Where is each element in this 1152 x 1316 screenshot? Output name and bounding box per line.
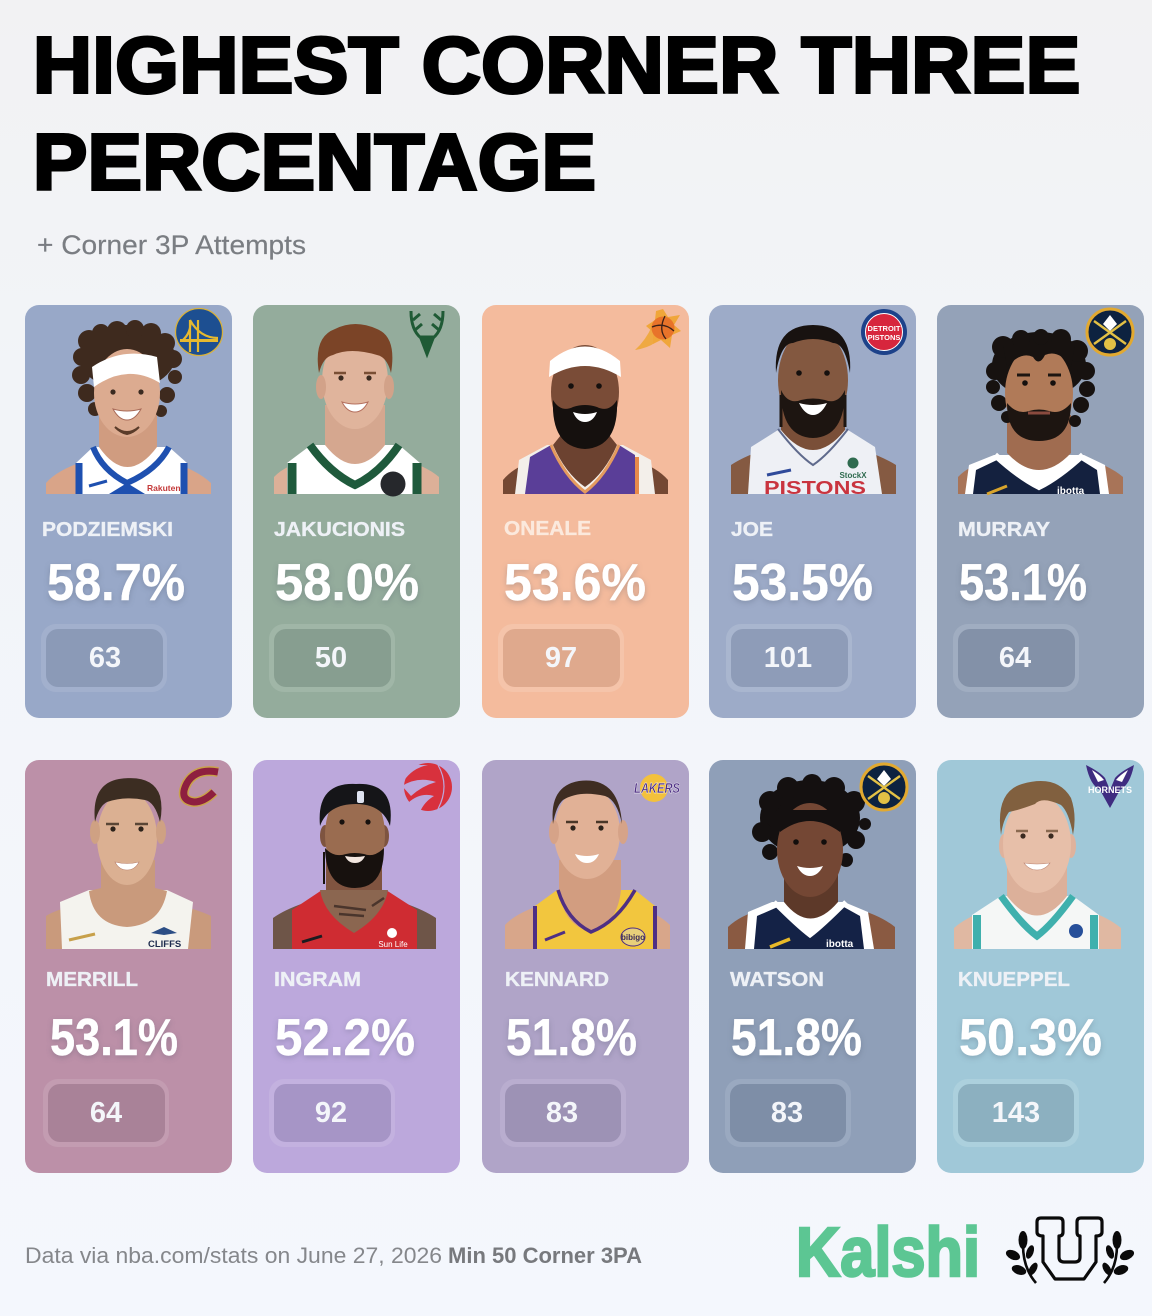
percentage: 51.8% xyxy=(506,1009,637,1067)
card: Podziemski xyxy=(25,305,232,718)
attempts pill: 101 xyxy=(764,642,812,674)
card: Watson xyxy=(709,760,916,1173)
attempts pill: 64 xyxy=(90,1097,122,1129)
portrait: Merrill xyxy=(46,778,211,950)
name: KNUEPPEL xyxy=(958,969,1070,991)
percentage: 50.3% xyxy=(959,1009,1102,1067)
percentage: 53.6% xyxy=(504,554,646,612)
percentage: 53.5% xyxy=(732,554,873,612)
percentage: 58.0% xyxy=(275,554,419,612)
portrait: Watson xyxy=(728,774,895,950)
attempts pill xyxy=(43,1079,169,1147)
team logo: Bucks xyxy=(411,311,443,357)
team logo: Lakers xyxy=(634,774,680,802)
title: PERCENTAGE xyxy=(33,118,596,207)
team logo: Warriors xyxy=(176,308,222,356)
team logo: Nuggets xyxy=(861,764,907,810)
portrait: Joe xyxy=(731,325,896,498)
name: PODZIEMSKI xyxy=(42,519,173,541)
percentage: 52.2% xyxy=(275,1009,415,1067)
card: Jakucionis xyxy=(253,305,460,718)
name: KENNARD xyxy=(505,969,609,991)
team logo: Raptors xyxy=(402,763,452,812)
card: Knueppel xyxy=(937,760,1144,1173)
name: INGRAM xyxy=(274,969,361,991)
title xyxy=(33,22,1080,207)
card: Joe xyxy=(709,305,916,718)
team logo: Suns xyxy=(635,309,681,350)
attempts pill: 97 xyxy=(545,642,577,674)
portrait: Podziemski xyxy=(46,320,211,494)
portrait: Oneale xyxy=(503,345,668,494)
portrait: Watson: ibotta xyxy=(826,939,854,950)
card: Ingram xyxy=(253,760,460,1173)
portrait: Murray: ibotta xyxy=(1057,486,1085,497)
attempts pill: 92 xyxy=(315,1097,347,1129)
portrait: Merrill: CLIFFS xyxy=(148,939,181,950)
portrait: Ingram xyxy=(273,784,436,949)
portrait: Podziemski: Rakuten xyxy=(147,483,181,493)
percentage: 53.1% xyxy=(50,1009,178,1067)
team logo: Pistons: PISTONS xyxy=(868,333,900,342)
footer source note: Min 50 Corner 3PA xyxy=(448,1243,642,1268)
attempts pill xyxy=(500,1079,626,1147)
percentage: 53.1% xyxy=(959,554,1087,612)
U laurel logo xyxy=(1004,1218,1136,1283)
card: Murray xyxy=(937,305,1144,718)
team logo: Nuggets xyxy=(1087,309,1133,355)
portrait: Joe: StockX xyxy=(839,471,867,480)
attempts pill xyxy=(498,624,624,692)
team logo: Lakers: LAKERS xyxy=(634,780,680,797)
name: WATSON xyxy=(730,969,824,991)
attempts pill: 143 xyxy=(992,1097,1040,1129)
name: JAKUCIONIS xyxy=(274,519,405,541)
percentage: 51.8% xyxy=(731,1009,862,1067)
attempts pill xyxy=(41,624,167,692)
name: ONEALE xyxy=(504,518,591,540)
attempts pill: 50 xyxy=(315,642,347,674)
attempts pill: 63 xyxy=(89,642,121,674)
portrait: Kennard: bibigo xyxy=(621,933,645,942)
attempts pill xyxy=(269,624,395,692)
portrait: Kennard xyxy=(505,781,670,949)
name: JOE xyxy=(731,519,773,541)
attempts pill xyxy=(953,1079,1079,1147)
footer source note: Data via nba.com/stats on June 27, 2026 xyxy=(25,1243,442,1268)
team logo: Cavaliers xyxy=(184,771,218,802)
attempts pill xyxy=(953,624,1079,692)
portrait: Ingram: Sun Life xyxy=(378,940,408,949)
card: Oneale xyxy=(482,305,689,718)
title: HIGHEST CORNER THREE xyxy=(33,22,1080,110)
attempts pill xyxy=(269,1079,395,1147)
portrait: Murray xyxy=(958,329,1123,497)
attempts pill: 83 xyxy=(771,1097,803,1129)
Kalshi logo: Kalshi xyxy=(796,1213,980,1291)
name: MURRAY xyxy=(958,519,1051,541)
subtitle: + Corner 3P Attempts xyxy=(37,230,306,260)
percentage: 58.7% xyxy=(47,554,185,612)
card: Kennard xyxy=(482,760,689,1173)
attempts pill: 64 xyxy=(999,642,1031,674)
team logo: Hornets xyxy=(1086,765,1134,808)
team logo: Pistons: DETROIT xyxy=(868,324,901,333)
attempts pill: 83 xyxy=(546,1097,578,1129)
team logo: Pistons xyxy=(861,309,907,355)
attempts pill xyxy=(726,624,852,692)
team logo: Hornets: HORNETS xyxy=(1088,785,1132,795)
portrait: Knueppel xyxy=(954,781,1121,949)
name: MERRILL xyxy=(46,969,138,991)
card: Merrill xyxy=(25,760,232,1173)
portrait: Joe: PISTONS xyxy=(764,478,866,498)
attempts pill xyxy=(725,1079,851,1147)
portrait: Jakucionis xyxy=(274,324,439,496)
